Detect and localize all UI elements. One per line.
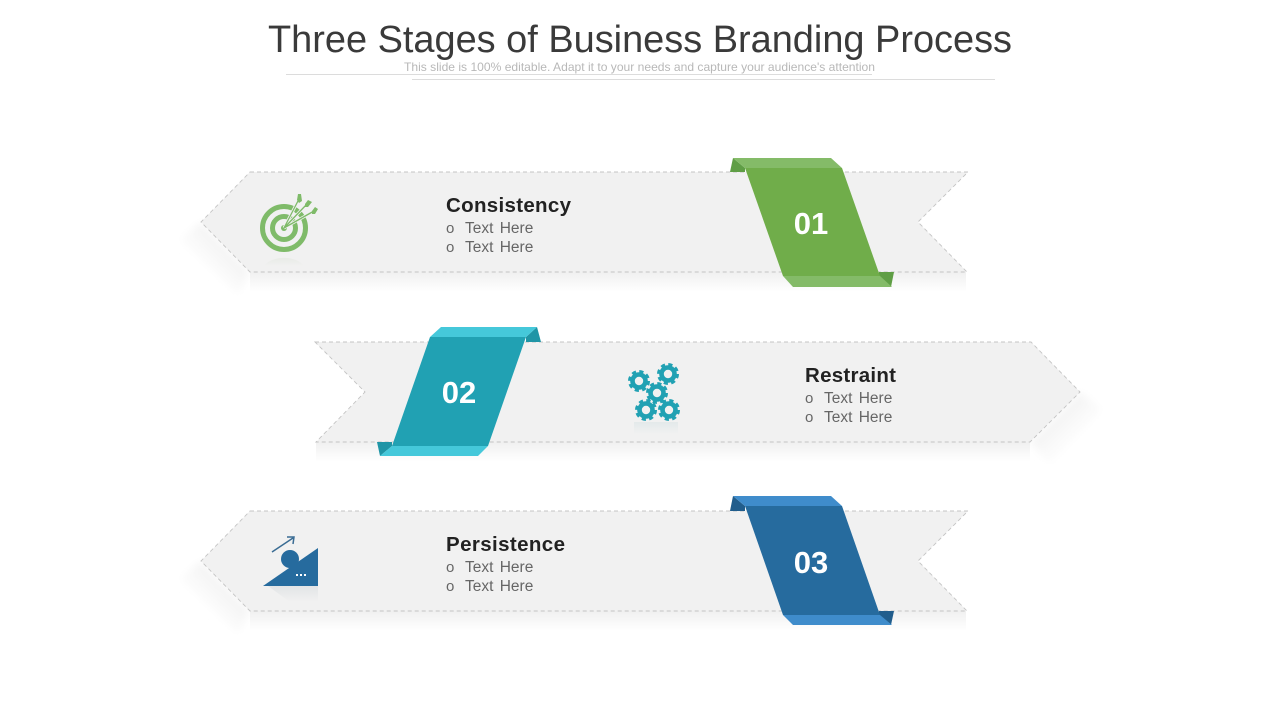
arrow band [201, 172, 968, 272]
ribbon: 03 [730, 496, 894, 625]
icon: ball pushed up slope [263, 537, 318, 602]
heading: Restraint [805, 364, 896, 387]
ribbon: 02: 02 [442, 375, 476, 410]
panel: consistency [180, 158, 968, 294]
ribbon: 01: 01 [794, 206, 828, 241]
bullet list [446, 220, 533, 256]
bullet list: Text Here [824, 390, 892, 407]
subtitle: This slide is 100% editable. Adapt it to your needs and capture your audience's attention [404, 60, 875, 74]
bullet list: Text Here [465, 239, 533, 256]
panel: persistence [180, 496, 968, 633]
bullet list [446, 559, 533, 595]
bullet list: o [446, 220, 454, 237]
bullet list: Text Here [465, 578, 533, 595]
arrow band [201, 511, 968, 611]
bullet list: Text Here [465, 559, 533, 576]
bullet list [805, 390, 892, 426]
title: Three Stages of Business Branding Process [268, 19, 1012, 61]
heading: Persistence [446, 533, 565, 556]
ribbon: 02 [377, 327, 541, 456]
bullet list: o [805, 409, 813, 426]
ribbon: 03: 03 [794, 545, 828, 580]
arrow band [315, 342, 1080, 442]
bullet list: o [446, 559, 454, 576]
icon: gears [629, 364, 679, 434]
bullet list: o [446, 578, 454, 595]
bullet list: o [805, 390, 813, 407]
heading: Consistency [446, 194, 572, 217]
panel: restraint [315, 327, 1102, 464]
bullet list: Text Here [824, 409, 892, 426]
bullet list: o [446, 239, 454, 256]
bullet list: Text Here [465, 220, 533, 237]
ribbon: 01 [730, 158, 894, 287]
icon: target with arrows [262, 194, 318, 266]
